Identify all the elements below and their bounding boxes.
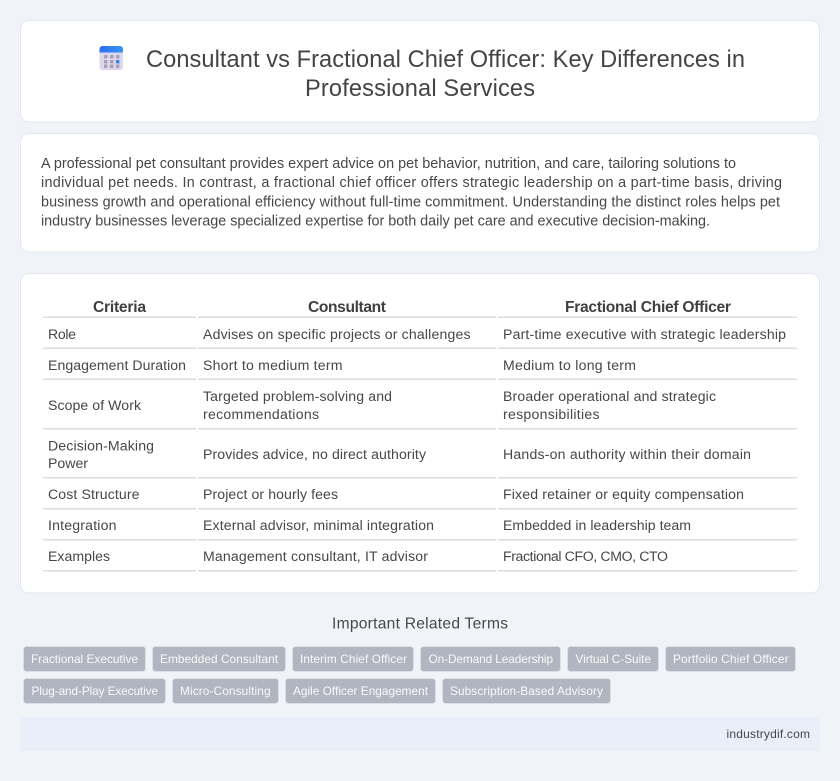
tags: related terms: Portfolio Chief Officer <box>673 652 789 666</box>
row: integration: Integration <box>48 517 116 533</box>
tags: related terms: Fractional Executive <box>31 652 138 666</box>
row: role <box>48 326 786 342</box>
row: examples: Fractional CFO, CMO, CTO <box>503 548 668 564</box>
panel: comparison table <box>20 274 820 593</box>
row: decision-making power <box>48 438 751 471</box>
row: integration: External advisor, minimal integration <box>203 517 434 533</box>
tags: related terms: Embedded Consultant <box>160 652 279 666</box>
panel: introduction <box>20 134 820 252</box>
tags: related terms: On-Demand Leadership <box>428 652 553 666</box>
row: cost structure: Project or hourly fees <box>203 486 338 502</box>
table header row: Consultant <box>308 299 386 316</box>
row: decision-making power: Provides advice, no direct authority <box>203 446 427 462</box>
tags: related terms: Micro-Consulting <box>180 684 270 698</box>
title <box>146 47 745 102</box>
row: scope of work: Broader operational and strategic <box>503 388 716 404</box>
row: engagement duration: Short to medium term <box>203 357 342 373</box>
table header row: Criteria <box>93 299 146 316</box>
table header row: Fractional Chief Officer <box>565 299 731 316</box>
icon: calendar <box>100 46 123 70</box>
row: engagement duration: Medium to long term <box>503 357 636 373</box>
row: cost structure: Fixed retainer or equity compensation <box>503 486 744 502</box>
row: examples <box>48 548 668 564</box>
panel: title header <box>20 20 820 122</box>
row: cost structure: Cost Structure <box>48 486 140 502</box>
row: decision-making power: Decision-Making <box>48 438 154 454</box>
row: integration: Embedded in leadership team <box>503 517 691 533</box>
row: scope of work: responsibilities <box>503 406 600 422</box>
tags: related terms: Virtual C-Suite <box>576 652 651 666</box>
title: Consultant vs Fractional Chief Officer: Key Differences in <box>146 47 745 73</box>
tags: related terms: Subscription-Based Advisory <box>450 684 603 698</box>
row: examples: Management consultant, IT advisor <box>203 548 428 564</box>
footer <box>20 717 820 751</box>
text block: introduction paragraph: A professional pet consultant provides expert advice on pet behavior, nutrition, and care, tailoring solutions to <box>41 156 736 172</box>
row: engagement duration <box>48 357 636 373</box>
text block: introduction paragraph <box>41 156 782 230</box>
row: scope of work <box>48 388 716 422</box>
heading: important related terms: Important Related Terms <box>332 616 508 632</box>
row: role: Advises on specific projects or challenges <box>203 326 470 342</box>
tags: related terms: Plug-and-Play Executive <box>32 684 158 698</box>
row: role: Part-time executive with strategic leadership <box>503 326 786 342</box>
footer: industrydif.com <box>726 727 810 741</box>
text block: introduction paragraph: industry businesses leverage specialized expertise for both daily pet care and executive decision-making. <box>41 214 710 230</box>
row: decision-making power: Power <box>48 455 88 471</box>
tags: related terms: Interim Chief Officer <box>300 652 407 666</box>
row: scope of work: Scope of Work <box>48 397 142 413</box>
title: Professional Services <box>305 76 535 102</box>
row: examples: Examples <box>48 548 110 564</box>
row: role: Role <box>48 326 76 342</box>
text block: introduction paragraph: individual pet needs. In contrast, a fractional chief officer offers strategic leadership on a part-time basis, driving <box>41 175 782 191</box>
row: decision-making power: Hands-on authority within their domain <box>503 446 751 462</box>
table header row <box>93 299 731 316</box>
row: engagement duration: Engagement Duration <box>48 357 186 373</box>
text block: introduction paragraph: business growth and operational efficiency without full-time commitment. Understanding the distinct roles helps pet <box>41 194 780 210</box>
tags: related terms: Agile Officer Engagement <box>293 684 429 698</box>
row: scope of work: recommendations <box>203 406 319 422</box>
row: integration <box>48 517 691 533</box>
tags: related terms <box>24 646 796 704</box>
row: scope of work: Targeted problem-solving and <box>203 388 392 404</box>
row: cost structure <box>48 486 744 502</box>
